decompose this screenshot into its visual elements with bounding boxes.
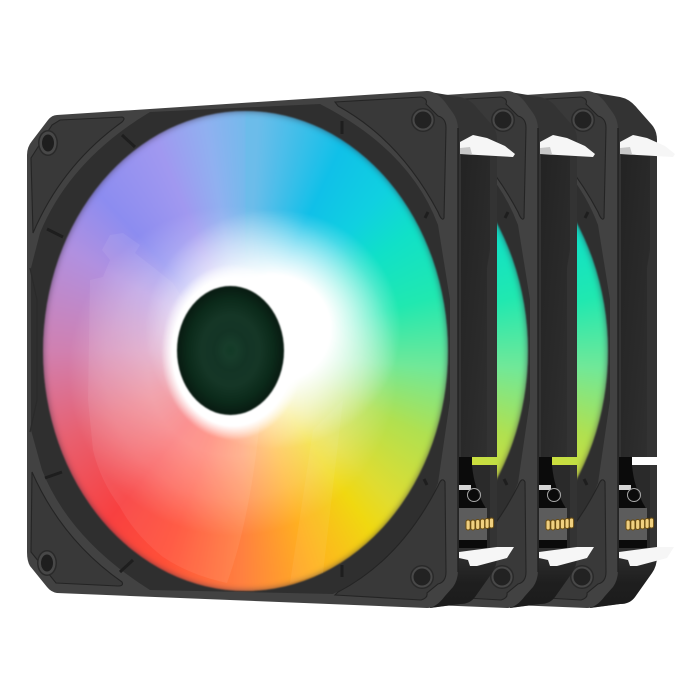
middle fan frame [446, 91, 595, 608]
front fan RGB ring [43, 111, 448, 591]
fan blade highlight [88, 233, 260, 583]
hub [177, 286, 284, 415]
blade edge highlight [290, 400, 343, 583]
middle fan [446, 91, 595, 608]
front fan blades and hub [88, 284, 339, 583]
front fan frame [27, 91, 515, 608]
rear fan frame [526, 91, 674, 608]
rear fan RGB ring [203, 111, 608, 591]
rear fan [526, 91, 674, 608]
middle fan RGB ring [123, 111, 528, 591]
front fan [27, 91, 515, 608]
